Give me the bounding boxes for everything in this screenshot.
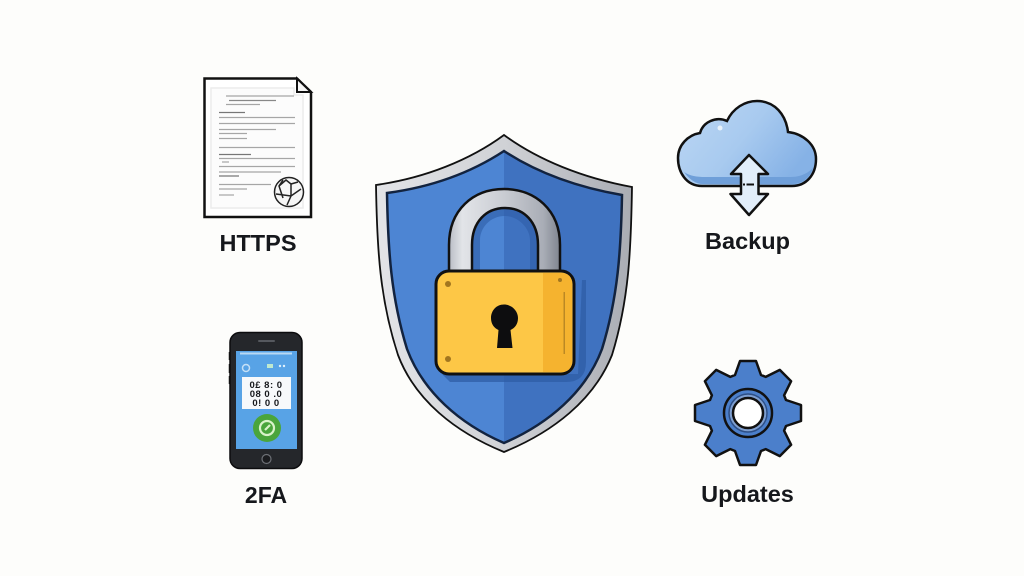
gear body [695, 361, 801, 465]
gear hole [733, 398, 763, 428]
icon: backup cloud [678, 101, 816, 215]
one-time code digits [249, 380, 283, 409]
label: Updates: Updates [701, 481, 794, 507]
phone screen [236, 351, 297, 449]
icon: HTTPS document [204, 78, 311, 217]
phone side buttons [228, 352, 230, 384]
padlock shadow on shield [442, 280, 586, 382]
icon: gear [695, 361, 801, 465]
up and down arrow [730, 155, 768, 215]
green confirm button [253, 414, 281, 442]
icon: smartphone 2FA [230, 332, 302, 468]
label: 2FA: 2FA [245, 482, 287, 508]
one-time code digits: 0! 0 0 [252, 398, 280, 409]
icon: shield with padlock [376, 135, 632, 452]
padlock shackle [449, 189, 560, 272]
phone body [230, 332, 302, 468]
document globe seal [274, 178, 304, 206]
app icons row [242, 364, 285, 372]
shield outer rim [376, 135, 632, 452]
gear ring [724, 389, 772, 437]
phone earpiece [258, 340, 275, 342]
home button [262, 454, 271, 464]
padlock rivets [445, 278, 565, 362]
status bar [240, 352, 292, 354]
one-time code digits: 0£ 8: 0 [249, 380, 283, 391]
shield blue left half [387, 151, 504, 443]
document inner frame [211, 88, 303, 208]
shadow behind shackle [472, 208, 538, 271]
one-time code digits: 08 0 .0 [250, 389, 282, 400]
padlock body [436, 271, 574, 374]
code display [242, 377, 291, 409]
arrow divider [743, 184, 754, 186]
cloud highlight [718, 126, 722, 130]
padlock body shade [543, 273, 572, 372]
keyhole [491, 304, 518, 348]
cloud bottom shade [684, 168, 813, 184]
clock check glyph [260, 421, 274, 435]
document text lines [219, 96, 295, 195]
label: Backup: Backup [705, 228, 790, 254]
document fold [297, 78, 311, 92]
gear inner collar [729, 394, 767, 432]
cloud shape [678, 101, 816, 186]
label: HTTPS: HTTPS [219, 230, 297, 256]
document sheet [204, 78, 311, 217]
shield blue outline [387, 151, 622, 443]
shield blue right half [504, 151, 622, 443]
